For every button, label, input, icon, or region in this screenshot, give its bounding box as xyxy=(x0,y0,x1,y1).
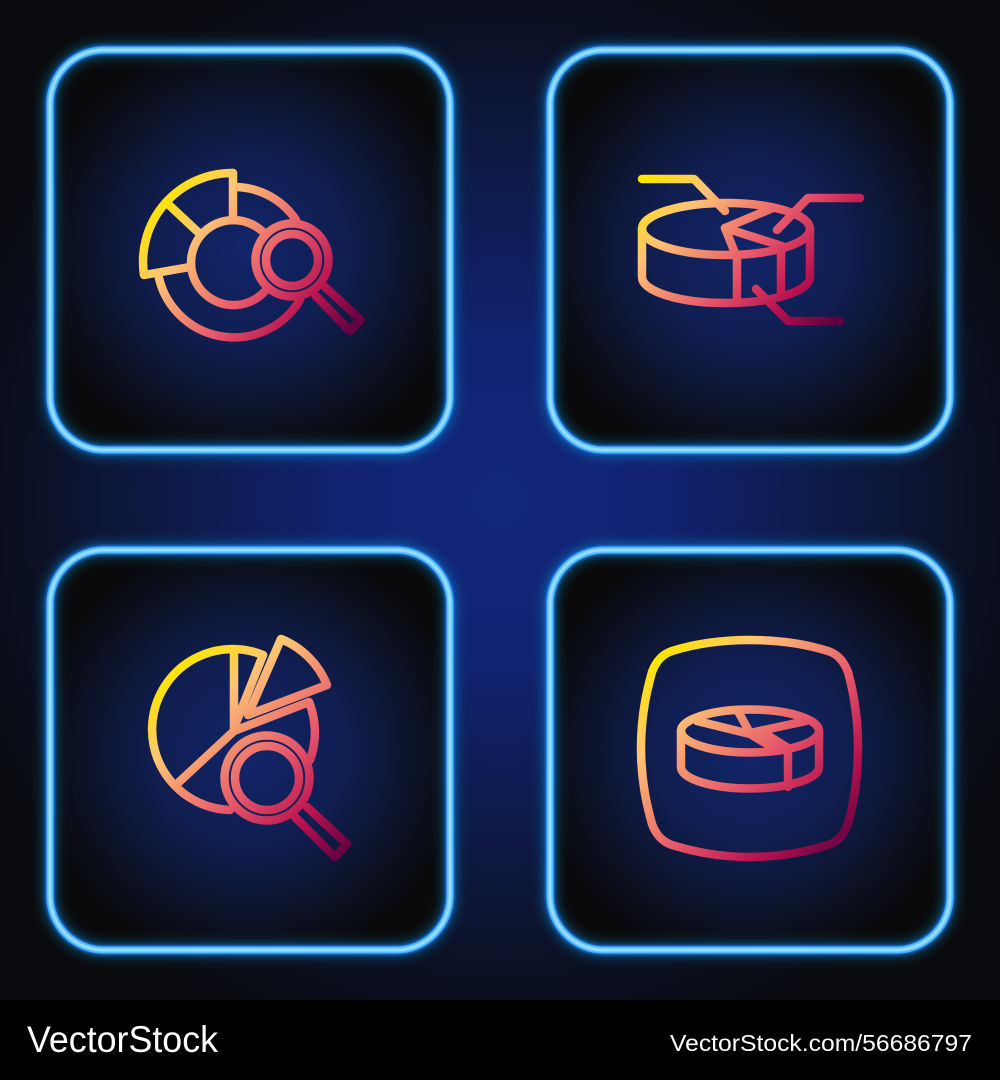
icon: 3D pie chart in squircle xyxy=(641,640,858,857)
icon: ring chart with magnifier xyxy=(143,173,361,337)
panel: top-right xyxy=(550,50,950,450)
panel: bottom-left xyxy=(50,550,450,950)
footer bar xyxy=(0,1000,1000,1080)
icon: 3D pie chart with callouts xyxy=(642,179,860,321)
panel: top-left xyxy=(50,50,450,450)
image id: VectorStock.com/56686797 xyxy=(670,1030,972,1056)
panel: bottom-right xyxy=(550,550,950,950)
icon: pie chart with magnifier xyxy=(152,639,347,857)
brand name: VectorStock xyxy=(27,1019,218,1060)
